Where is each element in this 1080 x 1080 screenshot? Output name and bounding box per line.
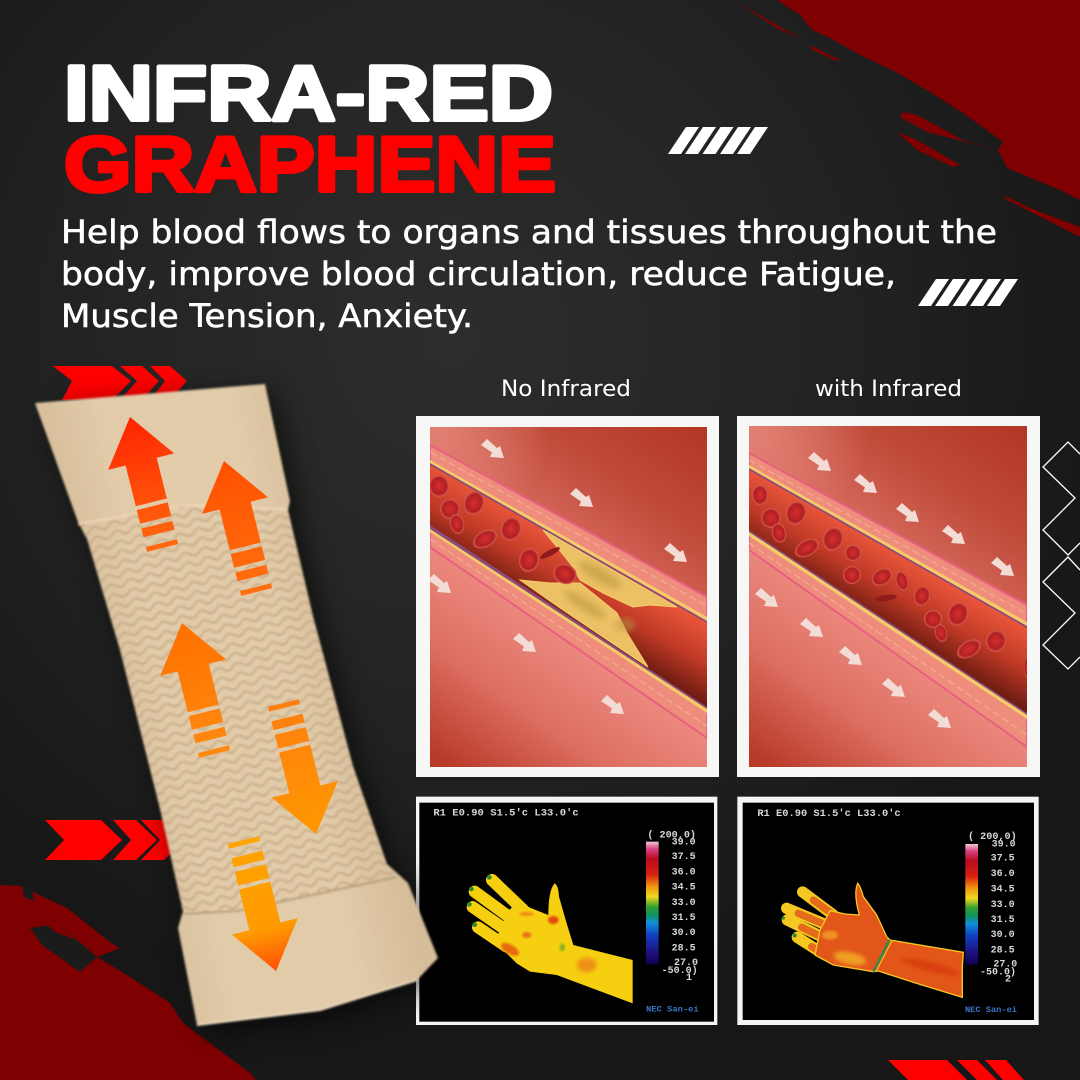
plaque xyxy=(520,530,677,667)
description text: body, improve blood circulation, reduce Fatigue, xyxy=(61,255,896,293)
temperature scale xyxy=(965,831,1017,984)
arrow: down bottom xyxy=(210,832,309,979)
red blood cells xyxy=(429,475,580,588)
red blood cells xyxy=(752,485,1030,677)
title xyxy=(64,49,556,208)
temperature scale: 36.0 xyxy=(672,866,696,877)
temperature scale: 34.5 xyxy=(672,882,696,893)
hatch mark: lower xyxy=(918,279,1018,306)
temperature scale: 2 xyxy=(1005,973,1011,984)
temperature scale: ( 200,0) xyxy=(647,830,696,841)
top chevrons xyxy=(53,366,187,400)
compression sleeve xyxy=(35,384,446,1033)
description text: Help blood flows to organs and tissues throughout the xyxy=(61,213,997,251)
temperature scale: 33.0 xyxy=(672,897,696,908)
camera readout: R1 E0.90 S1.5'c L33.0'c xyxy=(433,808,579,819)
temperature scale: 31.5 xyxy=(672,912,696,923)
temperature scale: 1 xyxy=(686,972,692,983)
description text: Muscle Tension, Anxiety. xyxy=(61,297,473,335)
camera brand: NEC San-ei xyxy=(965,1005,1017,1015)
temperature scale: 37.5 xyxy=(672,851,696,862)
label: with infrared: with Infrared xyxy=(815,377,962,402)
description text xyxy=(61,213,997,335)
temperature scale: 37.5 xyxy=(991,853,1015,864)
temperature scale: 28.5 xyxy=(672,942,696,953)
hand thermal shape xyxy=(467,875,633,1003)
camera readout: R1 E0.90 S1.5'c L33.0'c xyxy=(757,808,901,819)
temperature scale: -50.0) xyxy=(980,966,1016,977)
camera brand: NEC San-ei xyxy=(646,1004,699,1014)
temperature scale: ( 200,0) xyxy=(968,831,1017,842)
flow arrows xyxy=(755,452,1014,728)
hand thermal shape xyxy=(782,883,963,997)
flow arrows xyxy=(428,439,687,714)
arrow: up centre xyxy=(149,615,248,762)
temperature scale: 30.0 xyxy=(991,929,1015,940)
geometric outline pattern xyxy=(1043,442,1080,669)
temperature scale: 33.0 xyxy=(991,899,1015,910)
temperature scale: 39.0 xyxy=(672,836,696,847)
temperature scale: 27.0 xyxy=(993,959,1017,970)
arrow: down right xyxy=(250,695,349,842)
temperature scale: 36.0 xyxy=(991,868,1015,879)
temperature scale: -50.0) xyxy=(662,965,698,976)
panel: artery with infrared xyxy=(737,416,1040,777)
panel: thermal image without infrared xyxy=(416,797,717,1025)
title line 2: GRAPHENE xyxy=(64,120,556,208)
label: no infrared: No Infrared xyxy=(501,377,631,402)
arrow: up right xyxy=(191,453,290,600)
temperature scale: 39.0 xyxy=(992,839,1016,850)
arrow: up left xyxy=(97,409,196,556)
bottom-left red brush shape xyxy=(0,885,256,1080)
title line 1: INFRA-RED xyxy=(64,49,553,137)
temperature scale: 30.0 xyxy=(672,927,696,938)
top-right red brush shape xyxy=(737,0,1080,237)
panel: thermal image with infrared xyxy=(737,797,1039,1025)
temperature scale: 31.5 xyxy=(991,914,1015,925)
temperature scale: 28.5 xyxy=(991,944,1015,955)
hatch mark: upper xyxy=(668,127,768,154)
middle chevrons xyxy=(45,820,185,860)
panel: artery without infrared xyxy=(416,416,719,777)
temperature scale: 34.5 xyxy=(991,884,1015,895)
temperature scale: 27.0 xyxy=(674,957,698,968)
temperature scale xyxy=(646,830,698,983)
bottom-right red stripes xyxy=(888,1060,1024,1080)
